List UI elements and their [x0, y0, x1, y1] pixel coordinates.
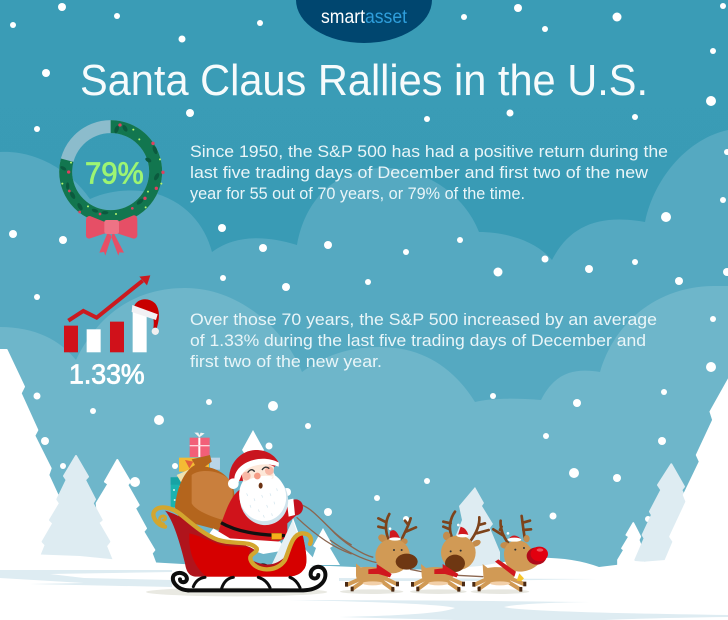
white tree behind sleigh: [270, 520, 307, 568]
left trees: [0, 350, 157, 570]
title: Santa Claus Rallies in the U.S.: [80, 56, 648, 105]
right trees: [618, 378, 728, 570]
text block: average increase: Over those 70 years, the S&P 500 increased by an average: [190, 310, 657, 329]
logo badge: asset: [365, 6, 408, 28]
santa hat: [229, 450, 279, 482]
reindeer 3: [472, 516, 548, 592]
center trees: [232, 430, 500, 570]
santa boot: [257, 563, 268, 570]
back cloud layer: [0, 130, 728, 620]
gauge value: 79%: [85, 156, 144, 190]
sleigh shadow: [146, 588, 327, 596]
text block: positive return: year for 55 out of 70 years, or 79% of the time.: [190, 184, 525, 203]
santa beard: [233, 465, 295, 531]
front cloud layer: [0, 286, 728, 620]
icon: bow: [86, 215, 137, 256]
santa lower fur: [208, 528, 287, 554]
bar chart with santa hat: [64, 275, 159, 389]
text block: average increase: [190, 310, 657, 371]
text block: positive return: [190, 142, 668, 203]
shadows: [340, 589, 403, 594]
santa belt: [221, 523, 285, 539]
logo badge: [296, 0, 432, 43]
snow ground: [0, 553, 728, 620]
snow streaks: [0, 570, 728, 620]
sleigh body: [165, 511, 306, 577]
reindeer 1: [345, 514, 418, 592]
text block: average increase: of 1.33% during the last five trading days of December and: [190, 331, 646, 350]
chart value: 1.33%: [69, 358, 145, 389]
gifts: [171, 433, 220, 507]
harness ropes: [330, 528, 483, 577]
reindeer team: [330, 512, 548, 594]
logo badge: smart: [321, 6, 366, 28]
santa glove: [287, 499, 303, 517]
reins: [297, 505, 352, 554]
wreath 79 percent gauge: [60, 123, 165, 256]
santa face: [228, 459, 279, 489]
sleigh runners: [173, 567, 325, 590]
santa and sleigh: [146, 433, 352, 596]
text block: positive return: Since 1950, the S&P 500 has had a positive return during the: [190, 142, 668, 161]
arrow: [68, 275, 150, 321]
santa body: [218, 488, 297, 548]
text block: positive return: last five trading days of December and first two of the new: [190, 163, 649, 182]
sack: [175, 455, 234, 530]
reindeer 2: [411, 512, 489, 592]
icon: santa hat: [132, 299, 159, 335]
text block: average increase: first two of the new year.: [190, 352, 382, 371]
sleigh gold trim: [153, 507, 311, 569]
